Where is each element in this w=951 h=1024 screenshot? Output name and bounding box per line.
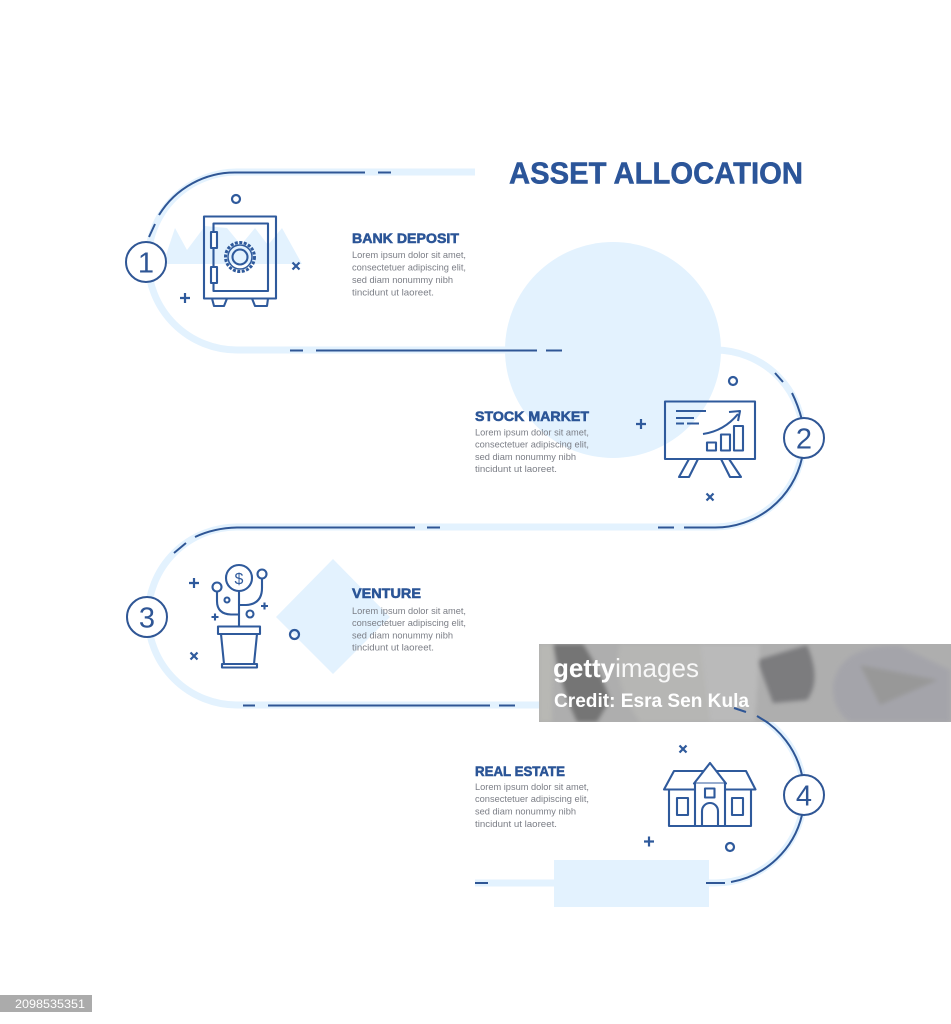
step 1 number bbox=[126, 242, 166, 282]
step 4 number bbox=[784, 775, 824, 815]
icon: board accents bbox=[636, 377, 737, 500]
image id tag: 2098535351 bbox=[15, 999, 85, 1011]
background shape: diamond bbox=[276, 559, 390, 674]
text block: stock market: Lorem ipsum dolor sit amet, bbox=[475, 428, 589, 438]
text block: venture bbox=[352, 585, 466, 652]
icon: safe accents bbox=[180, 195, 300, 303]
text block: stock market bbox=[475, 408, 589, 474]
text block: stock market: tincidunt ut laoreet. bbox=[475, 464, 557, 474]
watermark banner: gettyimages bbox=[553, 653, 699, 683]
text block: bank deposit bbox=[352, 230, 466, 298]
step 1 number: 1 bbox=[138, 248, 154, 280]
background shape: mountains behind safe bbox=[163, 226, 302, 264]
step 2 number: 2 bbox=[796, 424, 812, 456]
winding path: light track bbox=[148, 172, 804, 883]
icon: money plant bbox=[212, 565, 268, 668]
text block: venture: Lorem ipsum dolor sit amet, bbox=[352, 606, 466, 616]
icon: house accents bbox=[644, 746, 734, 851]
icon: money plant: $ bbox=[235, 571, 244, 588]
text block: venture: tincidunt ut laoreet. bbox=[352, 642, 434, 652]
text block: real estate: consectetuer adipiscing elit, bbox=[475, 794, 589, 804]
text block: bank deposit: BANK DEPOSIT bbox=[352, 230, 459, 246]
text block: bank deposit: sed diam nonummy nibh bbox=[352, 275, 453, 285]
text block: stock market: sed diam nonummy nibh bbox=[475, 452, 576, 462]
image id tag bbox=[0, 995, 92, 1012]
step 3 number: 3 bbox=[139, 602, 155, 634]
icon: presentation board bbox=[665, 402, 755, 477]
icon: plant accents bbox=[189, 578, 299, 660]
text block: venture: VENTURE bbox=[352, 585, 421, 601]
watermark banner bbox=[539, 644, 951, 727]
background shape: circle bbox=[505, 242, 721, 458]
text block: real estate bbox=[475, 763, 589, 829]
text block: bank deposit: consectetuer adipiscing elit, bbox=[352, 262, 466, 272]
text block: real estate: sed diam nonummy nibh bbox=[475, 806, 576, 816]
text block: bank deposit: tincidunt ut laoreet. bbox=[352, 288, 434, 298]
text block: stock market: STOCK MARKET bbox=[475, 408, 589, 424]
step 4 number: 4 bbox=[796, 780, 812, 812]
text block: venture: consectetuer adipiscing elit, bbox=[352, 618, 466, 628]
step 2 number bbox=[784, 418, 824, 458]
text block: real estate: tincidunt ut laoreet. bbox=[475, 819, 557, 829]
icon: house bbox=[664, 763, 756, 826]
text block: real estate: REAL ESTATE bbox=[475, 763, 565, 779]
step 3 number bbox=[127, 597, 167, 637]
text block: real estate: Lorem ipsum dolor sit amet, bbox=[475, 782, 589, 792]
text block: bank deposit: Lorem ipsum dolor sit amet, bbox=[352, 250, 466, 260]
winding path: dark dashes bbox=[149, 172, 802, 883]
background shape: rectangle bbox=[554, 860, 709, 907]
text block: stock market: consectetuer adipiscing elit, bbox=[475, 440, 589, 450]
title: ASSET ALLOCATION bbox=[509, 156, 803, 190]
watermark banner: Credit: Esra Sen Kula bbox=[554, 691, 749, 712]
icon: safe bbox=[204, 216, 276, 306]
text block: venture: sed diam nonummy nibh bbox=[352, 630, 453, 640]
